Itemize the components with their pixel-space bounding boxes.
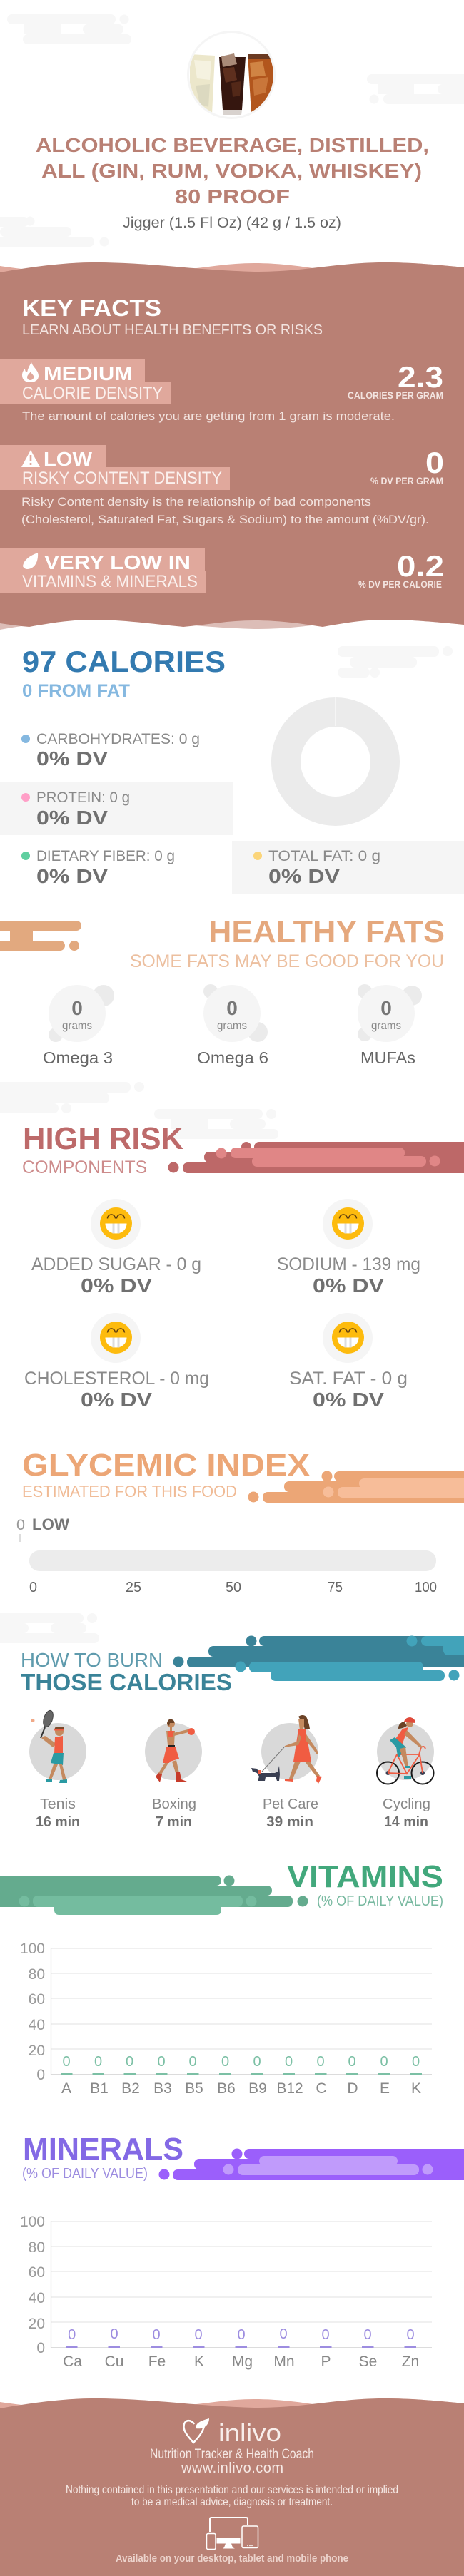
activity: boxing <box>145 1719 202 1830</box>
macro: dietary fiber: DIETARY FIBER: 0 g <box>36 848 175 864</box>
logo: inlivo <box>183 2418 281 2447</box>
subheading: from fat: 0 FROM FAT <box>22 681 130 701</box>
icon: flame <box>22 362 39 382</box>
activity: cycling: Cycling <box>383 1796 430 1812</box>
bar chart: vitamins: B2 <box>121 2080 140 2097</box>
gauge scale: 25 <box>126 1580 141 1595</box>
panel: minerals <box>20 2132 464 2370</box>
decorative header band <box>0 1876 308 1915</box>
title: 80 PROOF <box>175 185 290 208</box>
gauge bar <box>29 1550 436 1571</box>
subheading: percent of daily value: (% OF DAILY VALUE) <box>22 2166 148 2182</box>
bar chart: minerals: 0 <box>152 2327 161 2343</box>
bar chart: vitamins: 0 <box>126 2054 133 2070</box>
heading: healthy fats: HEALTHY FATS <box>208 914 445 949</box>
bar chart: minerals: 20 <box>29 2316 45 2332</box>
bar chart: minerals: Mn <box>273 2353 295 2370</box>
stat: omega 6 <box>197 984 268 1067</box>
gauge marker: 0 <box>16 1517 25 1533</box>
item: saturated fat <box>289 1313 408 1411</box>
bar chart: vitamins: 0 <box>188 2054 197 2070</box>
panel: healthy fats <box>0 914 445 1067</box>
bar chart: vitamins: 0 <box>94 2054 102 2070</box>
item: added sugar: 0% DV <box>81 1274 152 1297</box>
macro: protein: 0% DV <box>36 807 108 829</box>
bar chart: vitamins: 0 <box>62 2054 71 2070</box>
item: sodium <box>277 1199 420 1297</box>
bar chart: vitamins: 0 <box>221 2054 229 2070</box>
bar chart: minerals: 0 <box>36 2340 45 2356</box>
icon: cyclist <box>377 1717 434 1784</box>
item: added sugar: ADDED SUGAR - 0 g <box>31 1254 201 1274</box>
item: sodium: SODIUM - 139 mg <box>277 1254 420 1274</box>
callout: calorie density: CALORIE DENSITY <box>22 384 163 403</box>
callout: risky content density: LOW <box>44 448 93 470</box>
bar chart: vitamins: A <box>61 2080 71 2097</box>
item: cholesterol: CHOLESTEROL - 0 mg <box>24 1369 209 1389</box>
metric: percent DV per calorie: 0.2 <box>397 549 444 583</box>
macro: carbohydrates: CARBOHYDRATES: 0 g <box>36 731 200 747</box>
macro: protein <box>0 782 233 835</box>
macro: total fat: TOTAL FAT: 0 g <box>268 848 380 864</box>
macro: carbohydrates: 0% DV <box>36 747 108 770</box>
callout: vitamins and minerals <box>0 548 206 593</box>
macro: dietary fiber: 0% DV <box>36 865 108 887</box>
subheading: key facts: LEARN ABOUT HEALTH BENEFITS OR RISKS <box>22 322 323 338</box>
bar chart: vitamins: 0 <box>157 2054 166 2070</box>
metric: percent DV per calorie: % DV PER CALORIE <box>358 578 442 590</box>
bar chart: vitamins: B9 <box>248 2080 267 2097</box>
icon: grinning face <box>332 1207 364 1240</box>
callout: vitamins and minerals: VERY LOW IN <box>44 551 191 573</box>
description: risky content density <box>21 495 429 526</box>
panel: glycemic index <box>16 1448 464 1595</box>
macro: carbohydrates <box>21 731 200 770</box>
heading: how to burn: HOW TO BURN <box>21 1649 163 1671</box>
metric: percent DV per calorie <box>358 549 444 590</box>
stat: omega 3: 0 <box>71 997 83 1019</box>
stat: omega 6: Omega 6 <box>197 1048 268 1067</box>
decorative header band <box>158 2148 464 2180</box>
title: ALCOHOLIC BEVERAGE, DISTILLED, <box>36 134 429 156</box>
bar chart: vitamins: 0 <box>253 2054 261 2070</box>
bar chart: minerals: K <box>194 2353 204 2370</box>
stat: MUFAs: grams <box>371 1020 401 1032</box>
metric: calories per gram: 2.3 <box>398 360 443 394</box>
icon: devices <box>207 2518 258 2549</box>
bar chart: minerals: Mg <box>232 2353 253 2370</box>
metric: percent DV per gram: % DV PER GRAM <box>370 475 443 486</box>
bar chart: minerals: 0 <box>321 2327 330 2343</box>
gauge scale <box>29 1580 437 1595</box>
bar chart: vitamins: B1 <box>90 2080 109 2097</box>
bar chart: minerals: Zn <box>402 2353 419 2370</box>
activity: tennis: 16 min <box>36 1814 80 1830</box>
decorative header band <box>248 1471 464 1503</box>
icon: grinning face <box>100 1207 132 1240</box>
bar chart: vitamins: B3 <box>153 2080 172 2097</box>
activity: tennis <box>29 1709 86 1830</box>
bar chart: vitamins: 0 <box>380 2054 388 2070</box>
food photo: three glasses of distilled spirits <box>187 31 276 119</box>
description: risky content density: (Cholesterol, Saturated Fat, Sugars & Sodium) to the amount (%DV/gr). <box>21 513 429 526</box>
bar chart: minerals: Ca <box>63 2353 82 2370</box>
stat: MUFAs <box>358 984 422 1067</box>
bar chart: minerals: 0 <box>279 2326 288 2342</box>
bar chart: vitamins: 0 <box>348 2054 356 2070</box>
stat: omega 3: Omega 3 <box>43 1048 113 1067</box>
logo: inlivo: inlivo <box>218 2420 281 2447</box>
bar chart: minerals: P <box>321 2353 331 2370</box>
bar chart: vitamins: 100 <box>20 1941 45 1957</box>
icon: warning triangle <box>21 450 40 467</box>
subheading: components: COMPONENTS <box>22 1157 147 1177</box>
website link: www.inlivo.com <box>181 2460 283 2476</box>
panel: high risk components <box>22 1121 464 1411</box>
bar chart: vitamins: B5 <box>185 2080 203 2097</box>
disclaimer <box>66 2484 398 2508</box>
bar chart: minerals: 0 <box>68 2327 76 2343</box>
gauge scale: 75 <box>328 1580 343 1595</box>
panel: how to burn those calories <box>21 1636 464 1830</box>
bar chart: minerals: 60 <box>29 2264 45 2281</box>
bar chart: vitamins: B6 <box>217 2080 236 2097</box>
bar chart: minerals: 0 <box>110 2326 118 2342</box>
bar chart: vitamins: 80 <box>29 1966 45 1983</box>
bar chart: vitamins <box>20 1941 432 2097</box>
heading: those calories: THOSE CALORIES <box>21 1669 232 1695</box>
icon: leaf <box>23 553 38 569</box>
macro: protein: PROTEIN: 0 g <box>36 789 130 806</box>
title: ALL (GIN, RUM, VODKA, WHISKEY) <box>41 160 422 182</box>
heading: minerals: MINERALS <box>23 2132 183 2167</box>
callout: vitamins and minerals: VITAMINS & MINERALS <box>22 572 198 591</box>
panel: footer <box>0 2398 464 2576</box>
heading: vitamins: VITAMINS <box>287 1859 443 1894</box>
gauge marker <box>16 1516 69 1542</box>
bar chart: minerals: 0 <box>194 2327 203 2343</box>
icon: grinning face <box>332 1322 364 1354</box>
gauge scale: 50 <box>226 1580 241 1595</box>
bar chart: vitamins: 0 <box>36 2067 45 2083</box>
bar chart: vitamins: 40 <box>29 2017 45 2033</box>
panel: vitamins <box>0 1859 443 2097</box>
metric: percent DV per gram: 0 <box>425 446 444 479</box>
bar chart: vitamins: 0 <box>316 2054 325 2070</box>
donut chart <box>286 697 385 812</box>
activity: cycling <box>377 1717 434 1830</box>
subheading: estimated for this food: ESTIMATED FOR THIS FOOD <box>22 1482 237 1501</box>
item: added sugar <box>31 1199 201 1297</box>
heading: key facts: KEY FACTS <box>22 295 161 321</box>
decorative header band <box>0 921 81 951</box>
availability note: Available on your desktop, tablet and mobile phone <box>116 2552 348 2565</box>
macro: total fat <box>232 841 464 894</box>
item: sodium: 0% DV <box>313 1274 384 1297</box>
serving size: Jigger (1.5 Fl Oz) (42 g / 1.5 oz) <box>123 215 341 231</box>
icon: tennis player <box>31 1709 67 1783</box>
stat: MUFAs: 0 <box>380 997 392 1019</box>
bar chart: vitamins: 0 <box>285 2054 293 2070</box>
panel: calories <box>0 645 464 894</box>
bar chart: vitamins: D <box>347 2080 358 2097</box>
bar chart: vitamins: 20 <box>29 2043 45 2059</box>
activity: cycling: 14 min <box>384 1814 428 1830</box>
decorative header band <box>173 1636 464 1681</box>
item: cholesterol: 0% DV <box>81 1389 152 1411</box>
callout: calorie density: MEDIUM <box>44 362 133 384</box>
item: saturated fat: 0% DV <box>313 1389 384 1411</box>
heading: glycemic index: GLYCEMIC INDEX <box>22 1448 310 1483</box>
bar chart: minerals: Cu <box>105 2353 123 2370</box>
icon: grinning face <box>100 1322 132 1354</box>
activity: boxing: Boxing <box>152 1796 196 1812</box>
stat: omega 3 <box>43 985 114 1067</box>
bar chart: minerals: 100 <box>20 2214 45 2230</box>
gauge marker: LOW <box>32 1516 69 1533</box>
metric: calories per gram: CALORIES PER GRAM <box>348 389 443 401</box>
macro: dietary fiber <box>21 848 175 887</box>
bar chart: minerals: 0 <box>406 2327 415 2343</box>
item: saturated fat: SAT. FAT - 0 g <box>289 1369 408 1389</box>
disclaimer: to be a medical advice, diagnosis or treatment. <box>131 2496 333 2508</box>
macro: total fat: 0% DV <box>268 865 340 887</box>
bar chart: minerals: Fe <box>148 2353 166 2370</box>
gauge scale: 100 <box>415 1580 437 1595</box>
heading: calories: 97 CALORIES <box>22 645 226 678</box>
metric: percent DV per gram <box>370 446 444 486</box>
title <box>36 134 429 208</box>
description: calorie density: The amount of calories you are getting from 1 gram is moderate. <box>22 409 395 423</box>
bar chart: minerals: Se <box>359 2353 377 2370</box>
activity: pet care <box>251 1715 322 1830</box>
stat: MUFAs: MUFAs <box>360 1048 415 1067</box>
callout: calorie density <box>0 359 171 404</box>
bar chart: minerals: 0 <box>363 2327 372 2343</box>
callout: risky content density <box>0 445 230 490</box>
panel: key facts <box>0 262 464 630</box>
bar chart: vitamins: B12 <box>276 2080 303 2097</box>
bar chart: vitamins: E <box>380 2080 390 2097</box>
subheading: percent of daily value: (% OF DAILY VALUE) <box>317 1893 443 1909</box>
description: risky content density: Risky Content density is the relationship of bad components <box>21 495 371 508</box>
icon: boxer <box>156 1719 195 1782</box>
bar chart: minerals: 40 <box>29 2290 45 2306</box>
bar chart: vitamins: C <box>316 2080 327 2097</box>
bar chart: minerals: 80 <box>29 2239 45 2256</box>
callout: risky content density: RISKY CONTENT DENSITY <box>22 469 222 488</box>
subheading: healthy fats: SOME FATS MAY BE GOOD FOR YOU <box>130 951 444 971</box>
activity: boxing: 7 min <box>156 1814 192 1830</box>
metric: calories per gram <box>348 360 443 401</box>
bar chart: vitamins: K <box>411 2080 421 2097</box>
decorative header band <box>168 1142 464 1173</box>
bar chart: minerals <box>20 2214 432 2370</box>
bar chart: vitamins: 60 <box>29 1991 45 2008</box>
activity: tennis: Tenis <box>40 1796 76 1812</box>
tagline: Nutrition Tracker & Health Coach <box>150 2447 314 2462</box>
heading: high risk: HIGH RISK <box>23 1121 183 1156</box>
item: cholesterol <box>24 1313 209 1411</box>
stat: omega 6: grams <box>217 1020 247 1032</box>
icon: woman walking dog <box>251 1715 322 1784</box>
bar chart: minerals: 0 <box>237 2327 246 2343</box>
stat: omega 6: 0 <box>226 997 238 1019</box>
activity: pet care: Pet Care <box>263 1796 318 1812</box>
activity: pet care: 39 min <box>266 1814 313 1830</box>
gauge scale: 0 <box>29 1580 37 1595</box>
bar chart: vitamins: 0 <box>412 2054 420 2070</box>
stat: omega 3: grams <box>62 1020 92 1032</box>
disclaimer: Nothing contained in this presentation and our services is intended or implied <box>66 2484 398 2496</box>
